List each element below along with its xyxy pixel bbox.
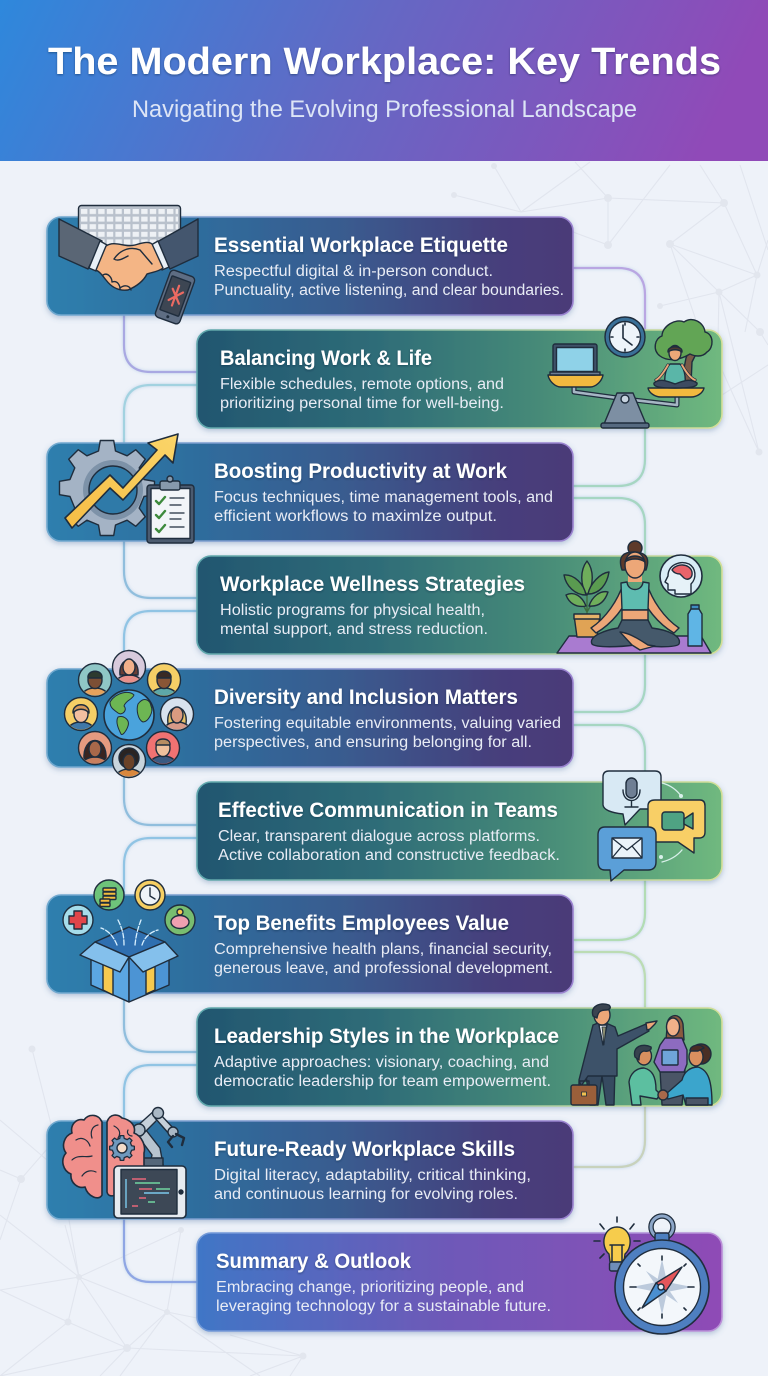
icon: leader with team — [571, 1004, 712, 1105]
text block: Active collaboration and constructive feedback. — [218, 847, 560, 864]
panel: Boosting Productivity at Work — [47, 434, 573, 543]
text block: Digital literacy, adaptability, critical thinking, — [214, 1167, 531, 1184]
text block: Comprehensive health plans, financial security, — [214, 941, 552, 958]
text block: Flexible schedules, remote options, and — [220, 376, 504, 393]
text block: Focus techniques, time management tools, and — [214, 489, 553, 506]
text block: perspectives, and ensuring belonging for all. — [214, 734, 532, 751]
icon: globe ringed by diverse people — [64, 650, 194, 785]
icon: open gift box with benefit badges — [63, 880, 195, 1002]
panel: Essential Workplace Etiquette — [47, 206, 573, 325]
heading: Summary & Outlook — [216, 1250, 411, 1273]
text block: leveraging technology for a sustainable future. — [216, 1298, 551, 1315]
text block: and continuous learning for evolving roles. — [214, 1186, 518, 1203]
heading: Future-Ready Workplace Skills — [214, 1138, 515, 1161]
panel: Workplace Wellness Strategies — [197, 541, 722, 654]
heading: Workplace Wellness Strategies — [220, 573, 525, 596]
connector lines — [124, 268, 645, 1282]
heading: Balancing Work & Life — [220, 347, 432, 370]
text block: mental support, and stress reduction. — [220, 621, 488, 638]
icon: speech bubbles with mic, video and mail — [598, 771, 705, 881]
header banner — [0, 0, 768, 161]
text block: Fostering equitable environments, valuing varied — [214, 715, 561, 732]
text block: democratic leadership for team empowerment. — [214, 1073, 551, 1090]
text block: Adaptive approaches: visionary, coaching, and — [214, 1054, 549, 1071]
heading: Essential Workplace Etiquette — [214, 234, 508, 257]
panel: Summary & Outlook — [197, 1216, 722, 1334]
heading: Top Benefits Employees Value — [214, 912, 509, 935]
text block: prioritizing personal time for well-being. — [220, 395, 504, 412]
icon: work-life balance scale — [548, 317, 712, 428]
text block: Holistic programs for physical health, — [220, 602, 485, 619]
text block: generous leave, and professional development. — [214, 960, 553, 977]
text block: Clear, transparent dialogue across platforms. — [218, 828, 540, 845]
icon: gear, growth arrow and clipboard — [60, 434, 194, 543]
heading: Diversity and Inclusion Matters — [214, 686, 518, 709]
panel: Future-Ready Workplace Skills — [47, 1108, 573, 1219]
panel: Effective Communication in Teams — [197, 771, 722, 881]
text block: efficient workflows to maximlze output. — [214, 508, 497, 525]
icon: yoga figure with plant, brain and bottle — [557, 541, 711, 653]
heading: Boosting Productivity at Work — [214, 460, 507, 483]
subtitle: Navigating the Evolving Professional Landscape — [132, 96, 637, 123]
icon: brain, robot arm and tablet — [63, 1108, 186, 1218]
panel: Top Benefits Employees Value — [47, 880, 573, 1002]
icon: light bulb and compass — [594, 1216, 709, 1334]
panel: Balancing Work & Life — [197, 317, 722, 428]
text block: Punctuality, active listening, and clear boundaries. — [214, 282, 564, 299]
heading: Leadership Styles in the Workplace — [214, 1025, 559, 1048]
text block: Respectful digital & in-person conduct. — [214, 263, 493, 280]
text block: Embracing change, prioritizing people, and — [216, 1279, 524, 1296]
icon: handshake, keyboard and phone — [59, 206, 198, 325]
title: The Modern Workplace: Key Trends — [48, 41, 721, 83]
heading: Effective Communication in Teams — [218, 799, 558, 822]
panel: Diversity and Inclusion Matters — [47, 650, 573, 785]
panel: Leadership Styles in the Workplace — [197, 1004, 722, 1106]
